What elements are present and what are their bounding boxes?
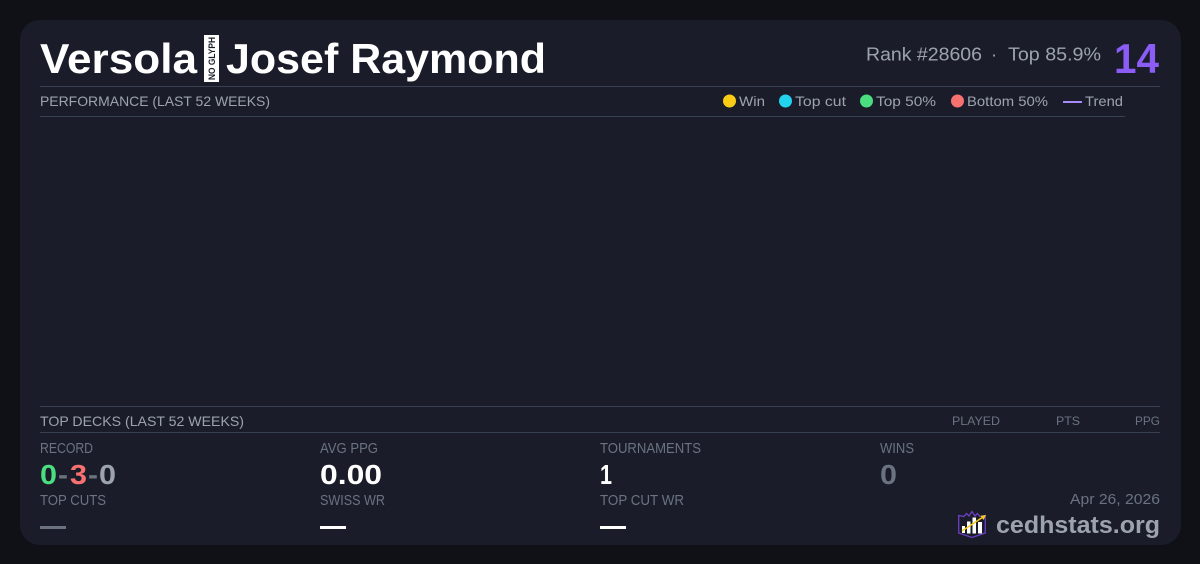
stat: record: 3 xyxy=(70,459,87,490)
stat: record: RECORD xyxy=(40,441,93,457)
stat: record: - xyxy=(58,459,68,490)
chart legend: Bottom 50% xyxy=(967,93,1048,109)
chart legend xyxy=(723,93,1123,109)
brand name: cedhstats.org xyxy=(996,512,1160,539)
stat: record: 0 xyxy=(99,459,116,490)
title: player name xyxy=(40,35,546,82)
stat: wins: 0 xyxy=(880,459,897,490)
chart legend: Top 50% xyxy=(876,93,936,109)
stat: record: - xyxy=(88,459,98,490)
stat: top cut win rate xyxy=(600,493,684,529)
icon: missing glyph box xyxy=(204,35,219,82)
icon: cedhstats logo xyxy=(959,512,986,538)
stat: average ppg: 0.00 xyxy=(320,459,382,490)
rank and percentile: Top 85.9% xyxy=(1008,44,1101,64)
icon: missing glyph box: NO GLYPH xyxy=(207,37,218,80)
stat: tournaments: TOURNAMENTS xyxy=(600,441,701,457)
rank and percentile: · xyxy=(991,44,997,64)
stat: swiss win rate xyxy=(320,493,385,529)
stat: wins xyxy=(880,441,914,490)
chart legend: Win xyxy=(739,93,765,109)
top decks column headers: PLAYED xyxy=(952,414,1000,428)
heading: top decks: TOP DECKS (LAST 52 WEEKS) xyxy=(40,413,244,429)
title: player name: Josef Raymond xyxy=(226,35,546,82)
chart legend: Top cut xyxy=(795,93,846,109)
stat: tournaments xyxy=(600,441,701,490)
stat: swiss win rate: SWISS WR xyxy=(320,493,385,509)
player score: 14 xyxy=(1114,35,1160,82)
rank and percentile: Rank #28606 xyxy=(866,44,982,64)
stat: top cuts xyxy=(40,493,106,529)
chart legend: Trend xyxy=(1085,93,1123,109)
stat: record xyxy=(40,441,116,490)
heading: performance: PERFORMANCE (LAST 52 WEEKS) xyxy=(40,93,270,109)
top decks column headers xyxy=(952,414,1160,428)
date: Apr 26, 2026 xyxy=(1070,492,1160,508)
title: player name: Versola xyxy=(40,35,198,82)
stat: tournaments: 1 xyxy=(600,459,612,490)
top decks column headers: PTS xyxy=(1056,414,1080,428)
top decks column headers: PPG xyxy=(1135,414,1160,428)
stat: average ppg: AVG PPG xyxy=(320,441,378,457)
rank and percentile xyxy=(866,44,1101,64)
stat: top cut win rate: TOP CUT WR xyxy=(600,493,684,509)
stat: wins: WINS xyxy=(880,441,914,457)
stat: record: 0 xyxy=(40,459,57,490)
stat: top cuts: TOP CUTS xyxy=(40,493,106,509)
stat: average ppg xyxy=(320,441,382,490)
